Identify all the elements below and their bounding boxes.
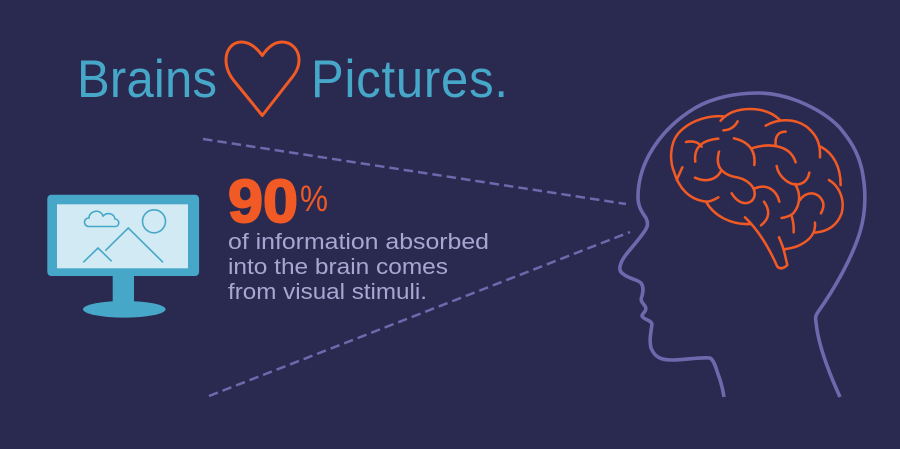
icon: computer monitor: [47, 195, 199, 318]
dashed sight line: bottom: [209, 232, 630, 396]
brain illustration: [671, 109, 843, 268]
title word: Brains: Brains: [77, 49, 217, 108]
description text: from visual stimuli.: [228, 279, 427, 304]
description text: of information absorbed: [228, 229, 489, 254]
dashed sight line: top: [203, 139, 626, 204]
statistic: 90 percent: 90: [228, 168, 298, 235]
statistic: 90 percent: [228, 168, 328, 235]
description text: into the brain comes: [228, 254, 448, 279]
statistic: 90 percent: %: [300, 178, 328, 219]
icon: heart: [226, 42, 299, 116]
title: [77, 42, 508, 116]
title word: Pictures.: Pictures.: [311, 49, 508, 108]
head profile outline: [620, 93, 865, 397]
description text: [228, 229, 489, 304]
